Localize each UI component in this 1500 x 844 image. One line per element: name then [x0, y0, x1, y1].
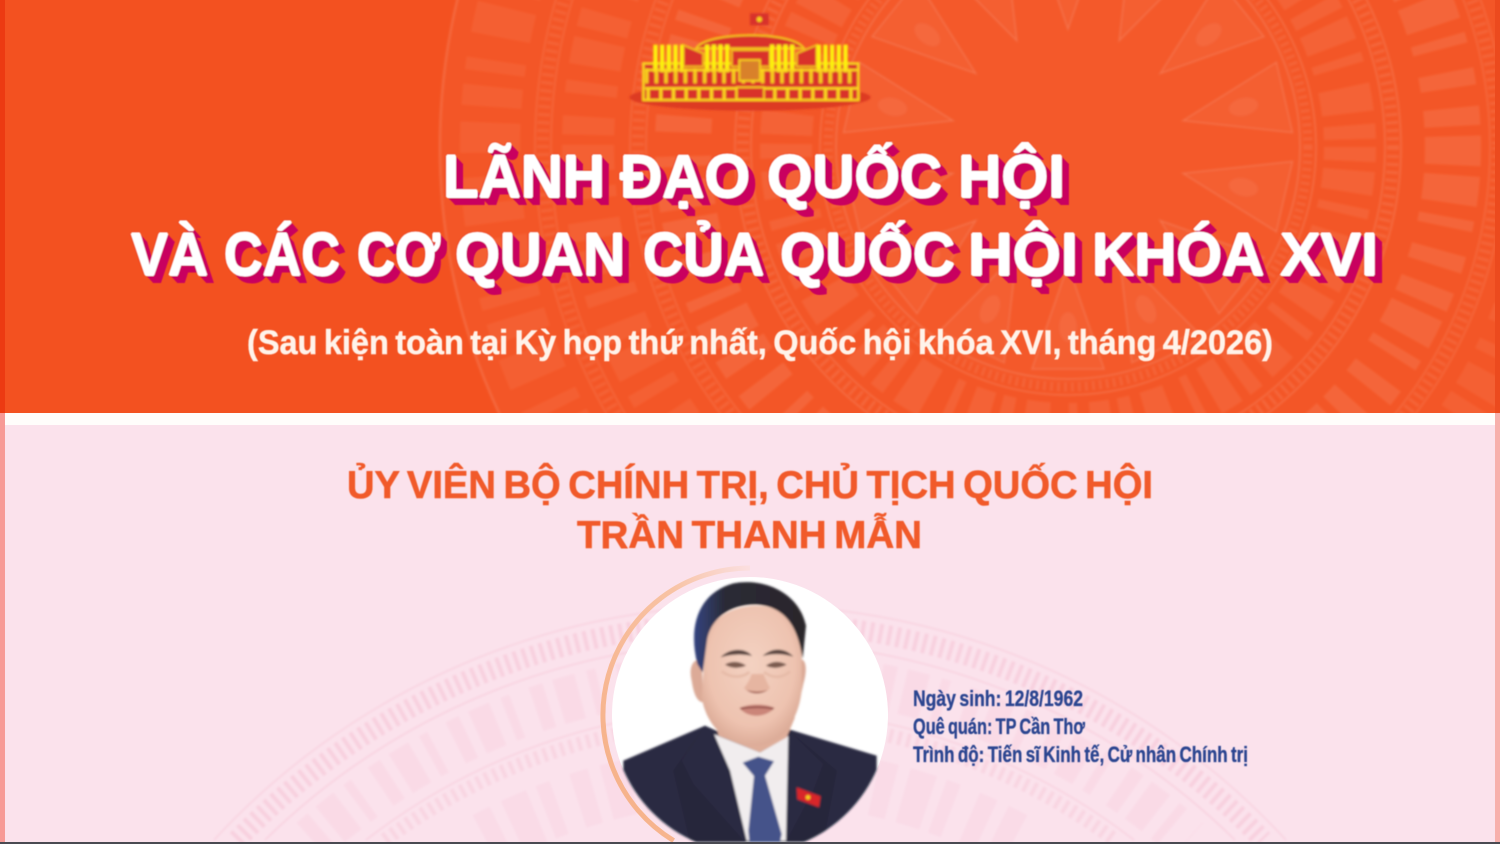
bronze drum pattern: header [438, 0, 1495, 413]
title: CƠ [357, 221, 441, 288]
nose shadow [747, 690, 767, 694]
bronze drum pattern: pink panel [230, 620, 1270, 842]
eye bags [722, 671, 790, 677]
heading: position and name: TRẦN THANH MẪN [577, 513, 922, 557]
logo dome [696, 35, 804, 48]
white divider band [0, 413, 1500, 425]
shirt [714, 734, 788, 841]
title: CÁC [224, 221, 340, 288]
title: XVI [1280, 221, 1378, 288]
hair [694, 582, 806, 672]
mouth line [741, 707, 773, 709]
heading: position and name: ỦY VIÊN BỘ CHÍNH TRỊ, CHỦ TỊCH QUỐC HỘI [347, 462, 1153, 507]
mouth [739, 704, 775, 716]
title: HỘI [968, 221, 1078, 288]
title: QUAN [455, 221, 625, 288]
title: CỦA [643, 221, 763, 288]
subtitle: (Sau kiện toàn tại Kỳ họp thứ nhất, Quốc hội khóa XVI, tháng 4/2026) [247, 324, 1273, 362]
nose [744, 674, 770, 693]
heading: position and name [347, 462, 1153, 557]
logo flag [750, 13, 769, 25]
header background [0, 0, 1500, 413]
eyes [725, 662, 787, 668]
eyebrows [721, 650, 793, 657]
personal details: Ngày sinh: 12/8/1962 [913, 686, 1083, 711]
lapel pin flag [797, 787, 821, 807]
tie [743, 757, 782, 842]
logo base ellipse [629, 84, 871, 111]
icon: parliament building logo [629, 13, 871, 111]
personal details: Trình độ: Tiến sĩ Kinh tế, Cử nhân Chính trị [913, 742, 1248, 767]
logo building [643, 45, 858, 100]
pink panel background [0, 425, 1500, 842]
right edge strip [1495, 0, 1500, 844]
lapels [690, 828, 826, 842]
neck [715, 717, 795, 752]
title: ĐẠO [620, 143, 750, 210]
left edge strip [0, 0, 5, 844]
title: LÃNH [443, 143, 605, 210]
title: QUỐC [767, 143, 942, 210]
portrait ring [603, 568, 750, 841]
title: KHÓA [1092, 221, 1263, 288]
portrait white circle [612, 577, 888, 842]
suit [623, 726, 877, 842]
title: VÀ [131, 221, 208, 288]
personal details: Quê quán: TP Cần Thơ [913, 714, 1085, 739]
face [702, 606, 802, 746]
personal details [913, 686, 1248, 767]
title [131, 143, 1378, 288]
portrait: man in suit inside circle with ring [600, 566, 888, 842]
title: HỘI [958, 143, 1065, 210]
ears [691, 659, 806, 702]
title: QUỐC [780, 221, 955, 288]
bottom edge line [0, 842, 1500, 844]
